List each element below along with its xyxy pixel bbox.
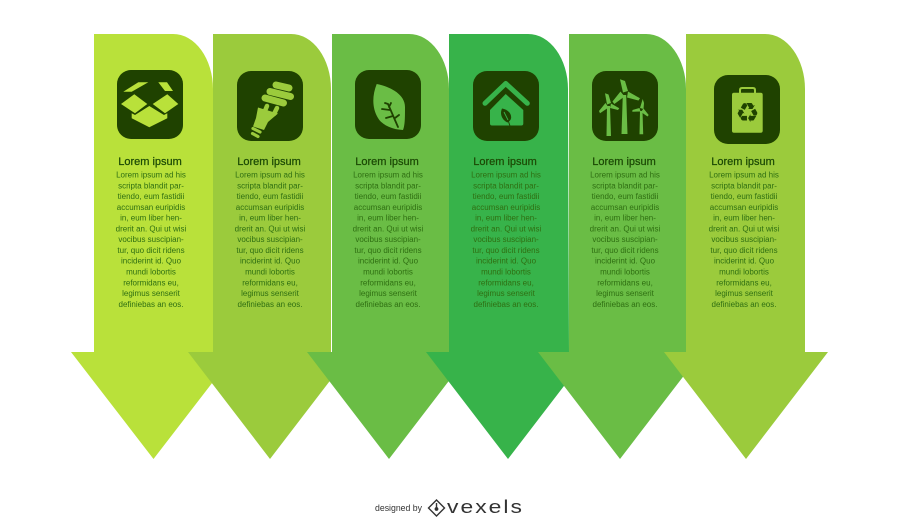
- arrow 6: [664, 34, 828, 459]
- vexels wordmark: vexels: [447, 497, 524, 517]
- icon: wind turbines: [592, 71, 658, 141]
- body text 2: legimus senserit: [241, 289, 300, 298]
- body text 5: inciderint id. Quo: [595, 257, 656, 266]
- body text 5: tiendo, eum fastidii: [592, 192, 659, 201]
- body text 4: drerit an. Qui ut wisi: [471, 224, 542, 233]
- body text 3: reformidans eu,: [360, 278, 416, 287]
- body text 5: mundi lobortis: [600, 268, 650, 277]
- body text 5: drerit an. Qui ut wisi: [590, 224, 661, 233]
- body text 6: tur, quo dicit ridens: [710, 246, 778, 255]
- body text 6: drerit an. Qui ut wisi: [709, 224, 780, 233]
- icon: vexels diamond: [428, 500, 444, 516]
- body text 4: legimus senserit: [477, 289, 536, 298]
- body text 1: mundi lobortis: [126, 268, 176, 277]
- column 5: wind turbines: [538, 34, 702, 459]
- body text 5: legimus senserit: [596, 289, 655, 298]
- body text 3: legimus senserit: [359, 289, 418, 298]
- body text 4: tur, quo dicit ridens: [472, 246, 540, 255]
- body text 2: scripta blandit par-: [237, 181, 303, 190]
- column 3: leaf: [307, 34, 471, 459]
- designed by label: designed by: [375, 503, 422, 513]
- body text 6: Lorem ipsum ad his: [709, 170, 779, 180]
- body text 4: tiendo, eum fastidii: [473, 192, 540, 201]
- arrow 3: [307, 34, 471, 459]
- column 4: eco house: [426, 34, 590, 459]
- body text 1: reformidans eu,: [123, 278, 179, 287]
- body text 4: scripta blandit par-: [473, 181, 539, 190]
- body text 2: Lorem ipsum ad his: [235, 170, 305, 180]
- body text 1: inciderint id. Quo: [121, 257, 182, 266]
- column 1: packaging: [71, 34, 236, 459]
- arrow 2: [188, 34, 352, 459]
- body text 6: vocibus suscipian-: [711, 235, 777, 244]
- body text 1: drerit an. Qui ut wisi: [116, 224, 187, 233]
- body text 6: mundi lobortis: [719, 268, 769, 277]
- heading 6: Lorem ipsum: [711, 156, 775, 168]
- arrow 5: [538, 34, 702, 459]
- column 2: energy saving bulb: [188, 34, 352, 459]
- body text 2: tur, quo dicit ridens: [236, 246, 304, 255]
- body text 6: reformidans eu,: [716, 278, 772, 287]
- body text 1: vocibus suscipian-: [118, 235, 184, 244]
- heading 1: Lorem ipsum: [118, 156, 182, 168]
- body text 1: tur, quo dicit ridens: [117, 246, 185, 255]
- icon: eco house: [473, 71, 539, 141]
- body text 5: definiebas an eos.: [593, 300, 657, 309]
- body text 5: accumsan euripidis: [591, 203, 659, 212]
- icon: open box: [117, 70, 183, 139]
- body text 3: definiebas an eos.: [356, 300, 420, 309]
- body text 4: in, eum liber hen-: [475, 214, 537, 223]
- body text 3: inciderint id. Quo: [358, 257, 419, 266]
- heading 2: Lorem ipsum: [237, 156, 301, 168]
- body text 1: in, eum liber hen-: [120, 214, 182, 223]
- body text 1: scripta blandit par-: [118, 181, 184, 190]
- body text 2: reformidans eu,: [242, 278, 298, 287]
- column 6: recycling bag: [664, 34, 828, 459]
- body text 4: inciderint id. Quo: [476, 257, 537, 266]
- icon: leaf: [355, 70, 421, 139]
- body text 2: definiebas an eos.: [238, 300, 302, 309]
- body text 5: in, eum liber hen-: [594, 214, 656, 223]
- footer logo: [375, 497, 524, 517]
- body text 6: in, eum liber hen-: [713, 214, 775, 223]
- body text 5: Lorem ipsum ad his: [590, 170, 660, 180]
- body text 2: inciderint id. Quo: [240, 257, 301, 266]
- body text 4: accumsan euripidis: [472, 203, 540, 212]
- body text 6: scripta blandit par-: [711, 181, 777, 190]
- icon: light bulb: [237, 71, 303, 141]
- body text 6: accumsan euripidis: [710, 203, 778, 212]
- body text 2: drerit an. Qui ut wisi: [235, 224, 306, 233]
- icon: recycling bag: ♻: [735, 98, 760, 129]
- body text 3: tur, quo dicit ridens: [354, 246, 422, 255]
- body text 3: vocibus suscipian-: [355, 235, 421, 244]
- body text 2: vocibus suscipian-: [237, 235, 303, 244]
- icon: recycling bag: [714, 75, 780, 144]
- body text 1: tiendo, eum fastidii: [118, 192, 185, 201]
- arrow 4: [426, 34, 590, 459]
- body text 4: Lorem ipsum ad his: [471, 170, 541, 180]
- body text 6: legimus senserit: [715, 289, 774, 298]
- body text 2: accumsan euripidis: [236, 203, 304, 212]
- body text 3: Lorem ipsum ad his: [353, 170, 423, 180]
- body text 3: drerit an. Qui ut wisi: [353, 224, 424, 233]
- body text 3: accumsan euripidis: [354, 203, 422, 212]
- body text 4: vocibus suscipian-: [473, 235, 539, 244]
- body text 5: vocibus suscipian-: [592, 235, 658, 244]
- body text 4: mundi lobortis: [481, 268, 531, 277]
- arrow 1: [71, 34, 236, 459]
- body text 6: definiebas an eos.: [712, 300, 776, 309]
- body text 5: tur, quo dicit ridens: [591, 246, 659, 255]
- body text 2: tiendo, eum fastidii: [237, 192, 304, 201]
- body text 2: in, eum liber hen-: [239, 214, 301, 223]
- heading 3: Lorem ipsum: [355, 156, 419, 168]
- body text 3: mundi lobortis: [363, 268, 413, 277]
- body text 6: inciderint id. Quo: [714, 257, 775, 266]
- body text 6: tiendo, eum fastidii: [711, 192, 778, 201]
- body text 1: definiebas an eos.: [119, 300, 183, 309]
- body text 5: scripta blandit par-: [592, 181, 658, 190]
- body text 1: Lorem ipsum ad his: [116, 170, 186, 180]
- body text 3: scripta blandit par-: [355, 181, 421, 190]
- body text 4: definiebas an eos.: [474, 300, 538, 309]
- body text 3: tiendo, eum fastidii: [355, 192, 422, 201]
- heading 4: Lorem ipsum: [473, 156, 537, 168]
- body text 5: reformidans eu,: [597, 278, 653, 287]
- body text 1: legimus senserit: [122, 289, 181, 298]
- body text 3: in, eum liber hen-: [357, 214, 419, 223]
- body text 1: accumsan euripidis: [117, 203, 185, 212]
- body text 2: mundi lobortis: [245, 268, 295, 277]
- heading 5: Lorem ipsum: [592, 156, 656, 168]
- body text 4: reformidans eu,: [478, 278, 534, 287]
